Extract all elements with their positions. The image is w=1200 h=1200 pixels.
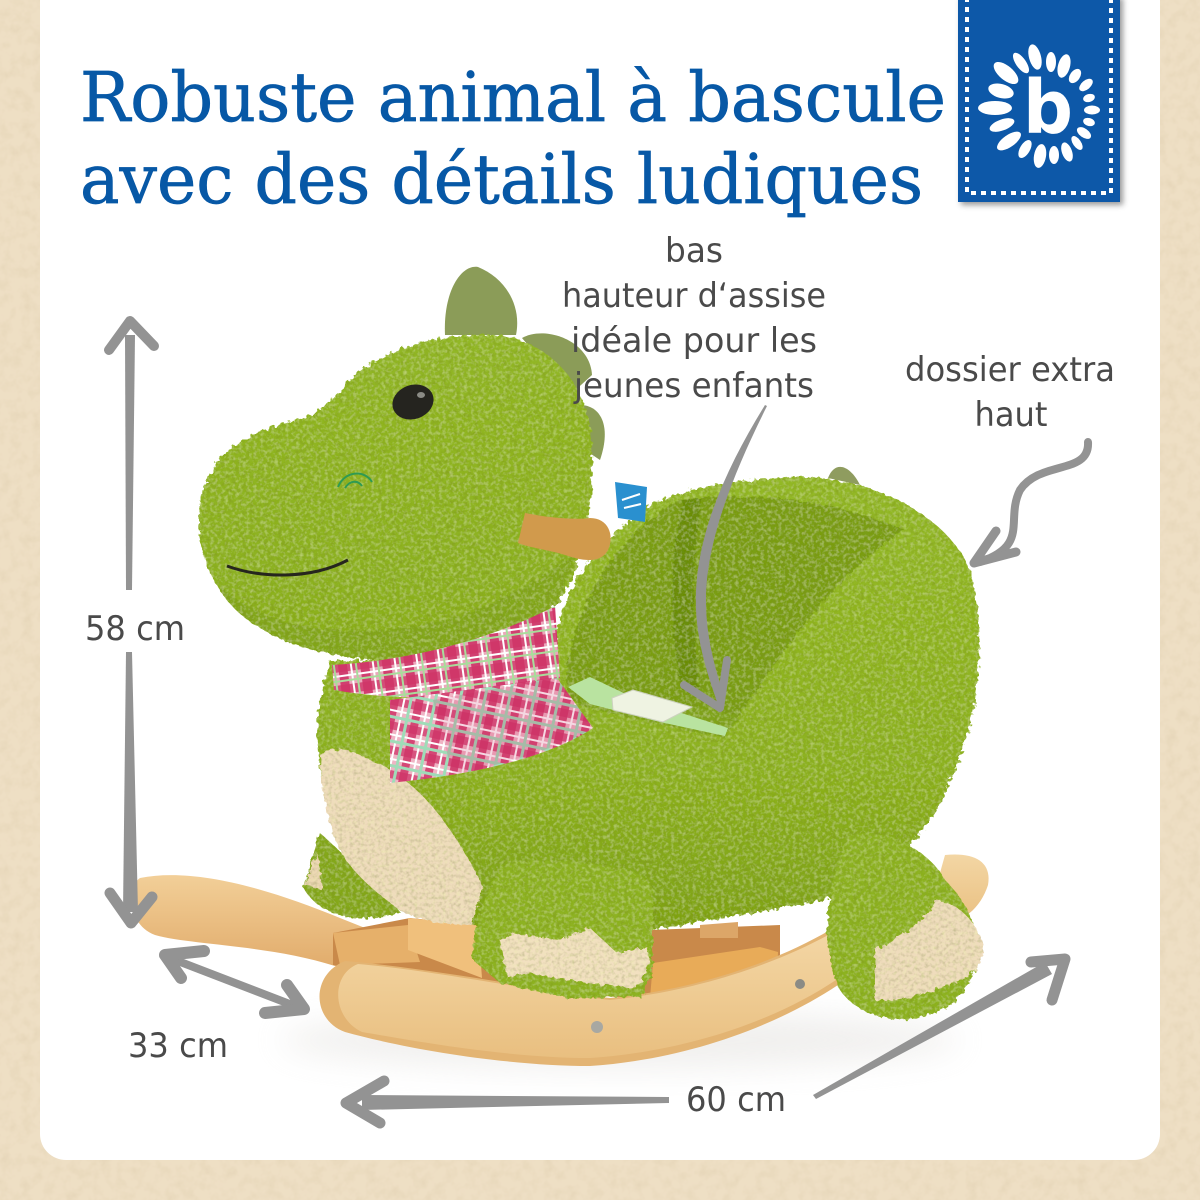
title: Robuste animal à bascule [80,59,946,138]
annotation: high backrest: haut [974,395,1048,435]
title: avec des détails ludiques [80,141,923,220]
annotation: seat height: hauteur d‘assise [562,276,826,316]
back right leg [303,833,400,919]
logo badge: b [1023,65,1073,151]
buckle strap [568,677,728,736]
annotation: seat height [562,231,826,406]
label tag [615,482,647,522]
seat body [318,477,979,930]
nostril [338,474,372,488]
wooden rockers [131,854,989,1066]
eye [387,379,439,425]
arrow: width left [346,1081,669,1123]
depth label: 33 cm [128,1026,228,1066]
height label: 58 cm [85,609,185,649]
annotation: seat height: jeunes enfants [573,366,814,406]
arrow: backrest [974,442,1088,563]
rocking horse toy [131,267,989,1066]
flower [978,43,1100,169]
arrow: width right [813,959,1065,1099]
back left leg [828,833,983,1019]
front leg [473,861,653,998]
arrow: seat [684,405,767,708]
scarf [332,606,593,783]
width label: 60 cm [686,1080,786,1120]
tail tip [828,467,860,485]
annotation: seat height: bas [665,231,723,271]
mouth [227,560,348,575]
arrow: height top [109,321,154,590]
annotation: high backrest: dossier extra [905,350,1115,390]
annotation: seat height: idéale pour les [571,321,817,361]
back spikes [445,267,605,460]
belly [321,749,483,925]
arrow: height bottom [110,652,152,923]
wooden handle [518,513,611,560]
floor shadow [280,1012,960,1068]
head [199,335,592,660]
annotation: high backrest [905,350,1115,435]
arrow: depth [165,951,304,1013]
logo badge [958,0,1120,202]
title [80,59,946,220]
